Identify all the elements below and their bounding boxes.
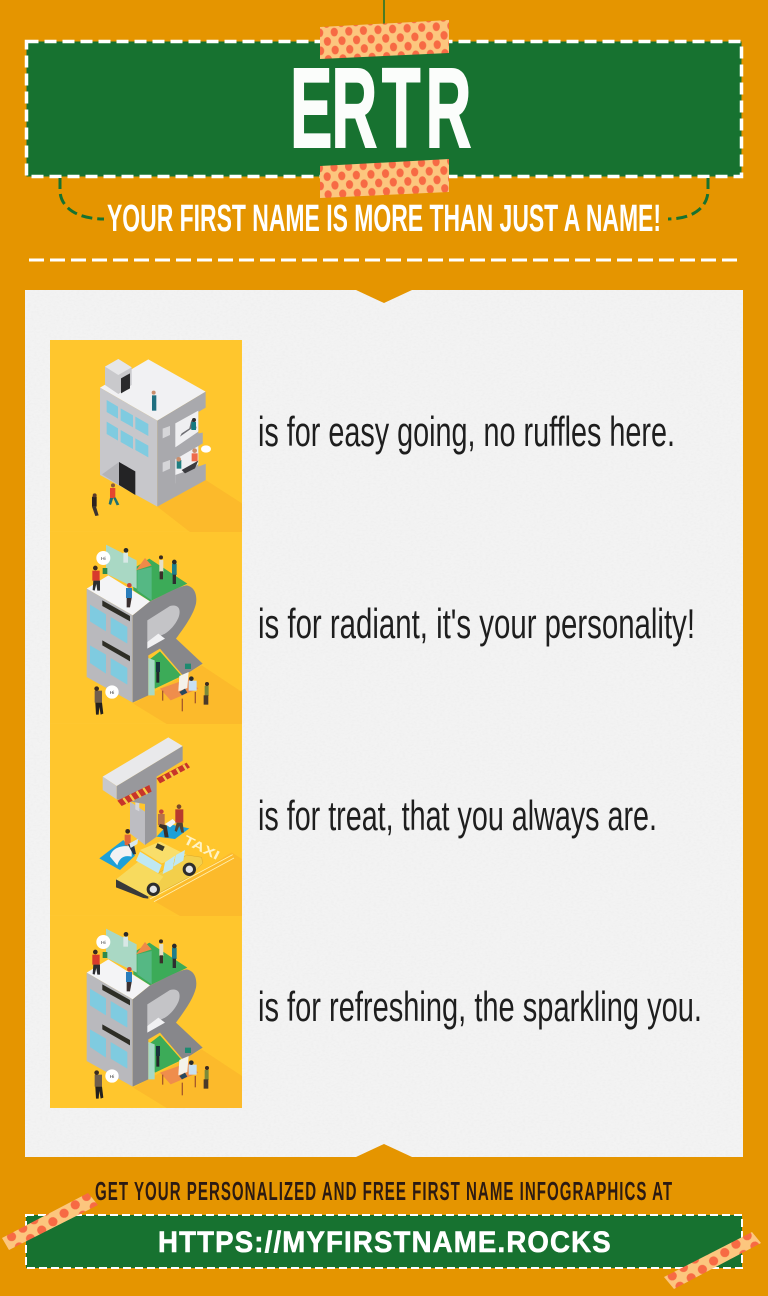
footer caption: GET YOUR PERSONALIZED AND FREE FIRST NAME INFOGRAPHICS AT xyxy=(95,1177,672,1206)
icon: letter R building: Hi xyxy=(101,556,106,562)
footer URL: HTTPS://MYFIRSTNAME.ROCKS xyxy=(158,1226,611,1259)
connector: right xyxy=(668,178,708,219)
tape: footer left xyxy=(2,1193,98,1250)
icon: letter T with taxi xyxy=(50,724,242,916)
title: ERTR: ERTR xyxy=(290,46,471,172)
icon: second letter R building xyxy=(50,916,242,1108)
icon: letter R building xyxy=(50,532,242,724)
footer banner xyxy=(26,1215,742,1268)
connector: left xyxy=(60,178,104,219)
panel: paper xyxy=(25,290,743,1157)
tape: footer right xyxy=(664,1232,761,1289)
title banner xyxy=(26,42,742,176)
icon: letter T with taxi: TAXI xyxy=(181,833,222,863)
icon: letter E building xyxy=(50,340,242,532)
hanging line xyxy=(383,0,385,24)
tape: top xyxy=(320,20,449,59)
tape: bottom xyxy=(320,159,449,198)
divider xyxy=(29,258,739,262)
icon: letter R building: Hi xyxy=(110,690,114,696)
